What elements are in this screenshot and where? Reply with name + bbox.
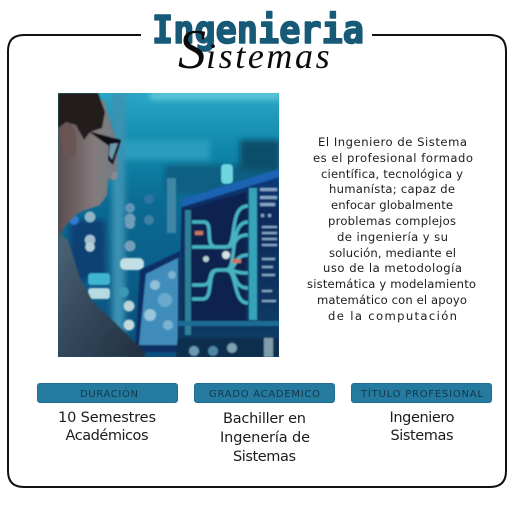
bokeh lights (69, 164, 233, 330)
description text: problemas complejos (328, 214, 456, 228)
title: Ingenieria: Ingenieria (152, 8, 364, 52)
description text: científica, tecnológica y (321, 167, 463, 181)
value: título profesional (390, 410, 455, 444)
description text (307, 135, 476, 323)
second monitor (135, 251, 180, 352)
description text: de ingeniería y su (337, 230, 448, 244)
value: título profesional: Sistemas (390, 428, 454, 444)
description text: sistemática y modelamiento (307, 277, 476, 291)
photo: engineer looking at monitors (58, 91, 280, 357)
value: duración (58, 410, 156, 444)
woman (58, 93, 145, 357)
value: título profesional: Ingeniero (390, 410, 455, 426)
column: duración (38, 384, 178, 444)
badge: grado académico: GRADO ACADEMICO (209, 389, 320, 400)
description text: matemático con el apoyo (317, 293, 467, 307)
badge: duración: DURACIÓN (80, 387, 138, 400)
value: grado académico: Sistemas (233, 449, 296, 465)
value: grado académico: Ingenería de (220, 430, 310, 446)
main monitor (176, 169, 279, 357)
value: duración: 10 Semestres (58, 410, 156, 426)
title (152, 8, 364, 81)
column: grado académico (194, 384, 334, 465)
column: título profesional (352, 384, 492, 444)
description text: uso de la metodología (323, 261, 462, 275)
value: grado académico (220, 411, 310, 465)
description text: enfocar globalmente (331, 198, 453, 212)
description text: El Ingeniero de Sistema (318, 135, 467, 149)
description text: humanísta; capaz de (329, 182, 455, 196)
value: grado académico: Bachiller en (223, 411, 306, 427)
description text: solución, mediante el (329, 246, 456, 260)
value: duración: Académicos (66, 428, 148, 444)
description text: de la computación (328, 309, 457, 323)
subtitle: Sistemas: Sistemas (178, 19, 332, 81)
description text: es el profesional formado (313, 151, 473, 165)
badge: título profesional: TÍTULO PROFESIONAL (360, 387, 483, 400)
